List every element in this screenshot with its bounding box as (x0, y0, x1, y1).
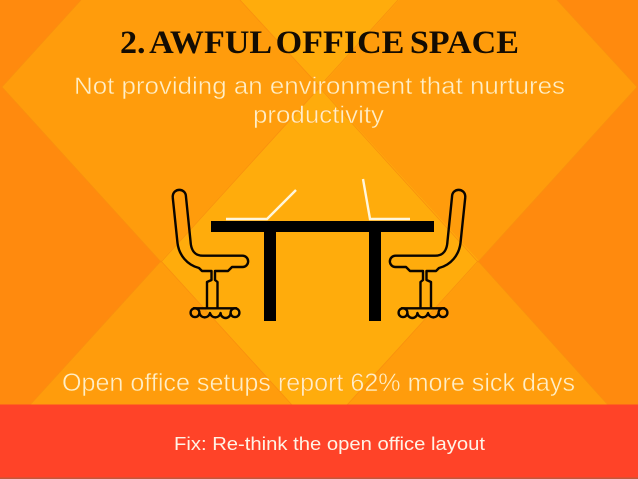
left laptop (226, 190, 296, 219)
right chair (390, 190, 465, 318)
icon: desk with laptops and chairs (173, 179, 465, 321)
subtitle: productivity (253, 102, 384, 129)
table (211, 221, 434, 321)
subtitle: Not providing an environment that nurtures (74, 73, 565, 100)
title: 2. AWFUL OFFICE SPACE (120, 25, 519, 61)
right laptop (363, 179, 410, 219)
left chair (173, 190, 248, 318)
fix text: Fix: Re-think the open office layout (174, 434, 485, 454)
fix banner (0, 404, 638, 479)
subtitle (74, 73, 565, 129)
statistic text: Open office setups report 62% more sick days (62, 369, 575, 397)
